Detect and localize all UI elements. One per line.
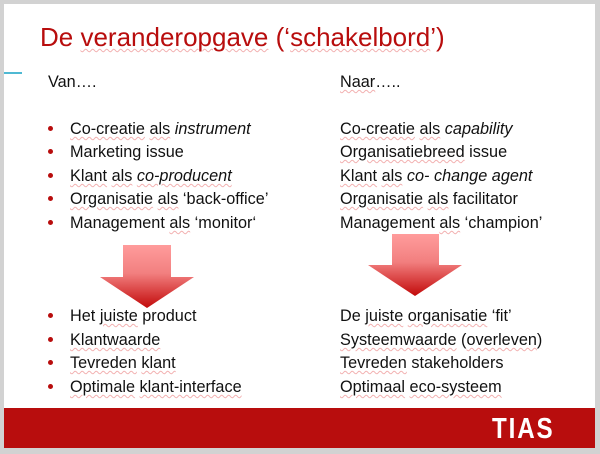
right list: bottom <box>340 307 542 398</box>
left list: top: Management als ‘monitor‘ <box>70 214 256 232</box>
right list: bottom: Optimaal eco-systeem <box>340 378 502 396</box>
right list: bottom: De juiste organisatie ‘fit’ <box>340 307 512 325</box>
right list: top: Organisatiebreed issue <box>340 143 507 161</box>
right list: top: Management als ‘champion’ <box>340 214 542 232</box>
right list: bottom: Tevreden stakeholders <box>340 354 504 372</box>
right list: bottom: Systeemwaarde (overleven) <box>340 331 542 349</box>
left column heading: Van…. <box>48 73 96 91</box>
left list: bottom: Klantwaarde <box>70 331 160 349</box>
arrow: left <box>100 245 194 308</box>
right list: top: Klant als co- change agent <box>340 167 532 185</box>
left list: bottom: Het juiste product <box>70 307 196 325</box>
left list: bottom: Optimale klant-interface <box>70 378 242 396</box>
arrow: right <box>368 234 462 296</box>
left list: top: Organisatie als ‘back-office’ <box>70 190 268 208</box>
left list: top <box>48 120 268 234</box>
right list: top <box>340 120 542 234</box>
left list: top: Co-creatie als instrument <box>70 120 251 138</box>
right column heading: Naar….. <box>340 73 401 91</box>
logo: TIAS: TIAS <box>492 412 555 444</box>
left list: top: Marketing issue <box>70 143 184 161</box>
left list: bottom: Tevreden klant <box>70 354 176 372</box>
title: De veranderopgave (‘schakelbord’) <box>40 22 445 52</box>
left list: bottom <box>48 307 242 398</box>
left list: top: Klant als co-producent <box>70 167 232 185</box>
accent line <box>4 72 22 74</box>
footer band <box>4 408 595 448</box>
right list: top: Organisatie als facilitator <box>340 190 518 208</box>
right list: top: Co-creatie als capability <box>340 120 513 138</box>
